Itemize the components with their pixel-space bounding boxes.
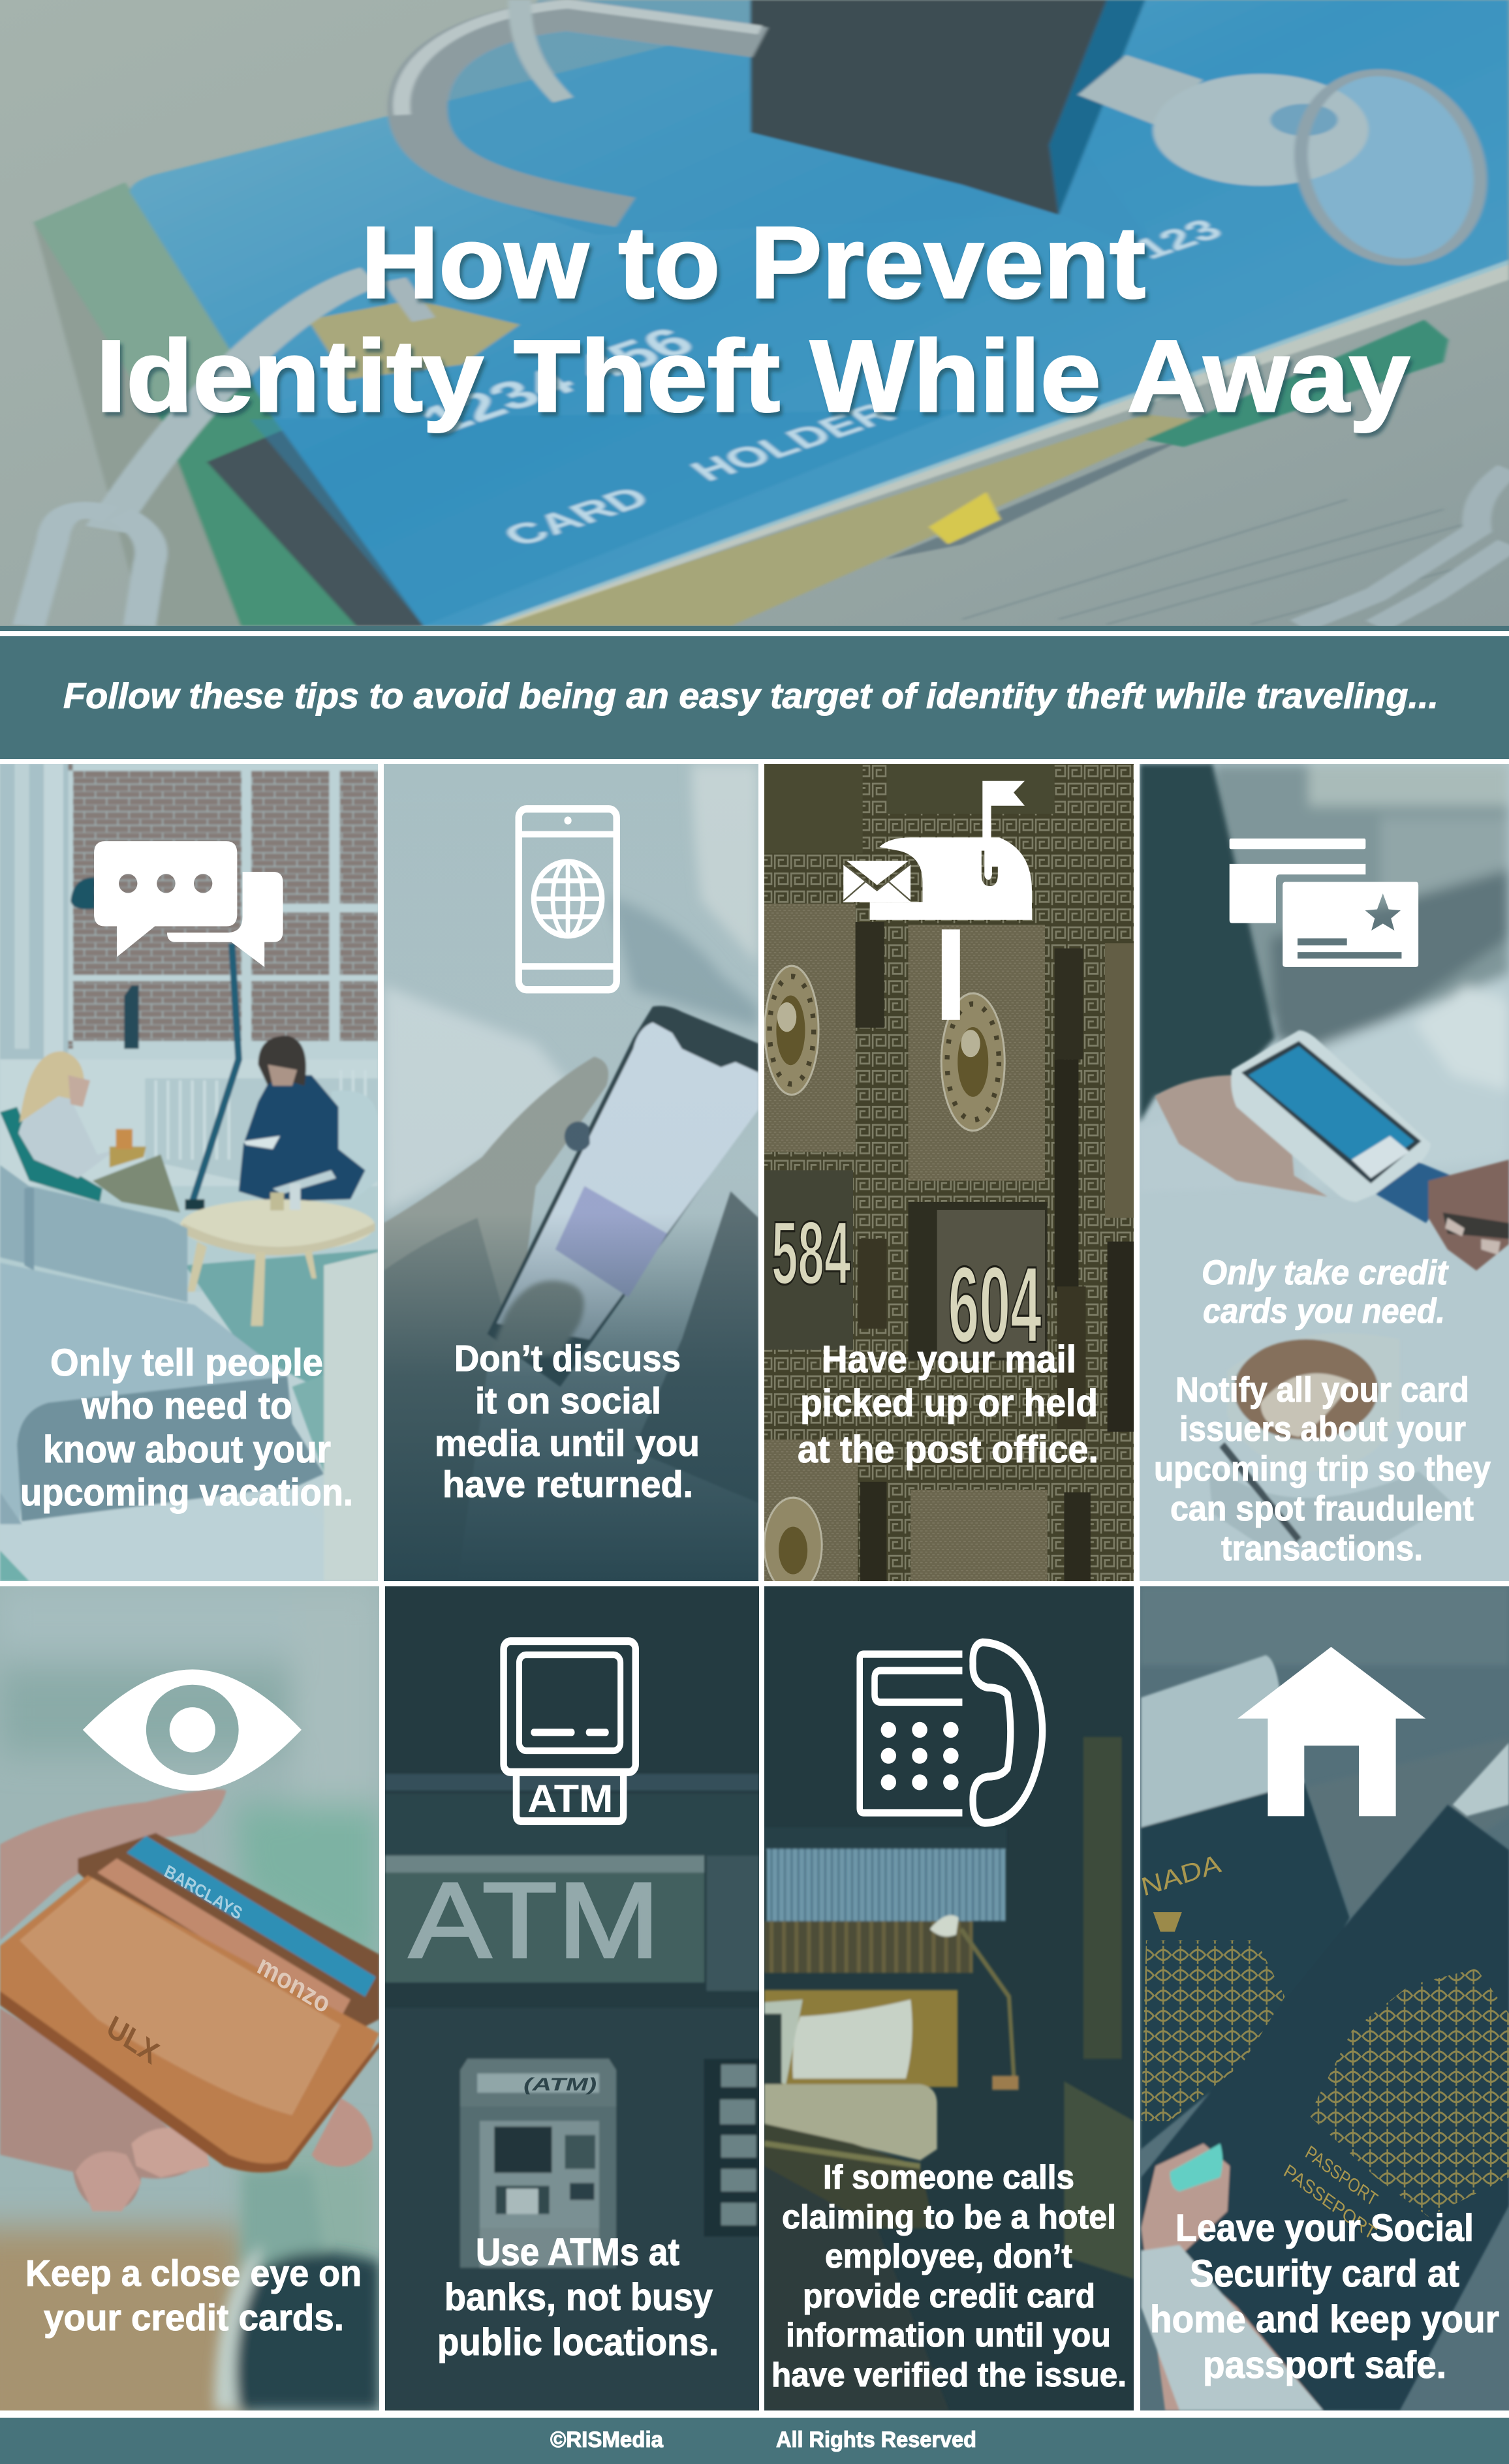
photo: hand holding leather wallet: BARCLAYS — [161, 1862, 245, 1924]
caption: it on social — [475, 1380, 661, 1422]
caption: primary tip: issuers about your — [1179, 1409, 1466, 1449]
icon: smartphone with globe — [519, 809, 617, 990]
footer: ©RISMedia — [550, 2427, 664, 2452]
caption: Have your mail — [822, 1338, 1076, 1381]
caption — [1150, 2207, 1499, 2386]
photo: hand holding leather wallet: monzo — [253, 1948, 335, 2020]
caption: who need to — [81, 1385, 292, 1427]
photo: Canadian passports — [1138, 1586, 1509, 2410]
photo: ATM sign and machine: ATM — [409, 1860, 660, 1980]
caption: primary tip: transactions. — [1221, 1529, 1423, 1568]
caption: home and keep your — [1150, 2298, 1499, 2341]
caption: primary tip: can spot fraudulent — [1170, 1489, 1474, 1528]
icon: chat bubbles — [94, 841, 283, 967]
caption: Keep a close eye on — [25, 2253, 362, 2294]
photo: brass post office boxes: 604 — [948, 1244, 1042, 1365]
caption: Use ATMs at — [476, 2231, 679, 2273]
panel: social media — [384, 763, 758, 1581]
panel: tell only people who need to know — [0, 763, 378, 1581]
photo: locked credit cards: HOLDER — [681, 396, 905, 487]
photo: hand holding leather wallet — [0, 1586, 379, 2410]
caption: have verified the issue. — [771, 2356, 1127, 2394]
icon: telephone — [860, 1642, 1042, 1823]
caption — [798, 1338, 1098, 1471]
footer — [0, 2418, 1509, 2464]
panel: use ATMs at banks — [385, 1586, 759, 2410]
photo: office lounge — [0, 764, 378, 1581]
caption: picked up or held — [800, 1382, 1098, 1424]
caption: your credit cards. — [44, 2297, 344, 2339]
caption: primary tip — [1154, 1254, 1491, 1568]
caption — [25, 2253, 362, 2339]
caption: primary tip: Notify all your card — [1175, 1370, 1469, 1409]
panel: credit cards you need — [1140, 763, 1509, 1581]
caption — [437, 2231, 719, 2364]
photo: ATM sign and machine — [385, 1586, 759, 2410]
icon: house — [1237, 1647, 1425, 1816]
panel: social security card and passport — [1138, 1586, 1509, 2410]
banner: intro sentence: Follow these tips to avoid being an easy target of identity theft while traveling... — [63, 675, 1439, 716]
photo: Canadian passports: PASSEPORT — [1281, 2160, 1380, 2244]
photo: Canadian passports: NADA — [1138, 1849, 1224, 1902]
photo: card payment terminal and coffee — [1140, 764, 1509, 1581]
icon: mailbox with envelope — [843, 781, 1032, 1020]
photo: brass post office boxes — [764, 764, 1134, 1581]
caption: claiming to be a hotel — [782, 2198, 1116, 2236]
caption — [435, 1338, 700, 1505]
caption: employee, don’t — [825, 2238, 1072, 2275]
caption: know about your — [43, 1428, 331, 1471]
caption: primary tip: Only take credit — [1202, 1254, 1449, 1292]
caption: Only tell people — [50, 1342, 323, 1384]
caption: provide credit card — [803, 2277, 1095, 2315]
banner: intro sentence — [0, 636, 1509, 759]
caption: banks, not busy — [444, 2276, 713, 2318]
caption: media until you — [435, 1423, 700, 1464]
photo: locked credit cards: 123 — [1123, 213, 1232, 265]
photo: brass post office boxes: 584 — [771, 1203, 850, 1303]
caption — [771, 2159, 1127, 2394]
photo: hand holding smartphone — [384, 764, 758, 1581]
divider band under hero — [0, 626, 1509, 631]
title — [96, 206, 1410, 433]
title: How to Prevent — [361, 206, 1145, 320]
photo: locked credit cards: 1234 456 — [407, 319, 707, 441]
icon: ATM machine: ATM — [527, 1777, 613, 1821]
caption: upcoming vacation. — [20, 1471, 353, 1514]
caption: passport safe. — [1203, 2344, 1446, 2386]
panel: keep eye on cards — [0, 1586, 379, 2454]
caption: Security card at — [1190, 2253, 1459, 2295]
caption: If someone calls — [823, 2159, 1074, 2196]
caption: Leave your Social — [1175, 2207, 1474, 2249]
photo: Canadian passports: PASSPORT — [1302, 2141, 1381, 2210]
icon: stacked cards with star — [1230, 839, 1418, 967]
photo: locked credit cards: CARD — [493, 481, 659, 552]
photo: dark hotel room — [764, 1586, 1134, 2410]
panel: mail hold — [764, 763, 1134, 1593]
caption: public locations. — [437, 2321, 719, 2364]
photo: hand holding leather wallet: ULX — [102, 2009, 164, 2071]
title: Identity Theft While Away — [96, 320, 1410, 433]
hero: credit cards with padlock photo and title — [0, 0, 1509, 626]
caption: Don’t discuss — [454, 1338, 681, 1379]
photo: locked credit cards — [0, 0, 1509, 626]
panel: hotel phone calls — [764, 1586, 1134, 2410]
coat of arms lace — [1309, 1969, 1509, 2217]
caption: primary tip: cards you need. — [1203, 1292, 1445, 1331]
photo: ATM sign and machine: (ATM) — [523, 2075, 597, 2095]
caption — [20, 1342, 353, 1514]
caption: information until you — [786, 2317, 1111, 2354]
caption: at the post office. — [798, 1428, 1098, 1471]
icon: eye — [83, 1669, 302, 1791]
icon: ATM machine — [504, 1641, 636, 1821]
caption: have returned. — [443, 1464, 693, 1505]
footer: All Rights Reserved — [776, 2427, 976, 2452]
